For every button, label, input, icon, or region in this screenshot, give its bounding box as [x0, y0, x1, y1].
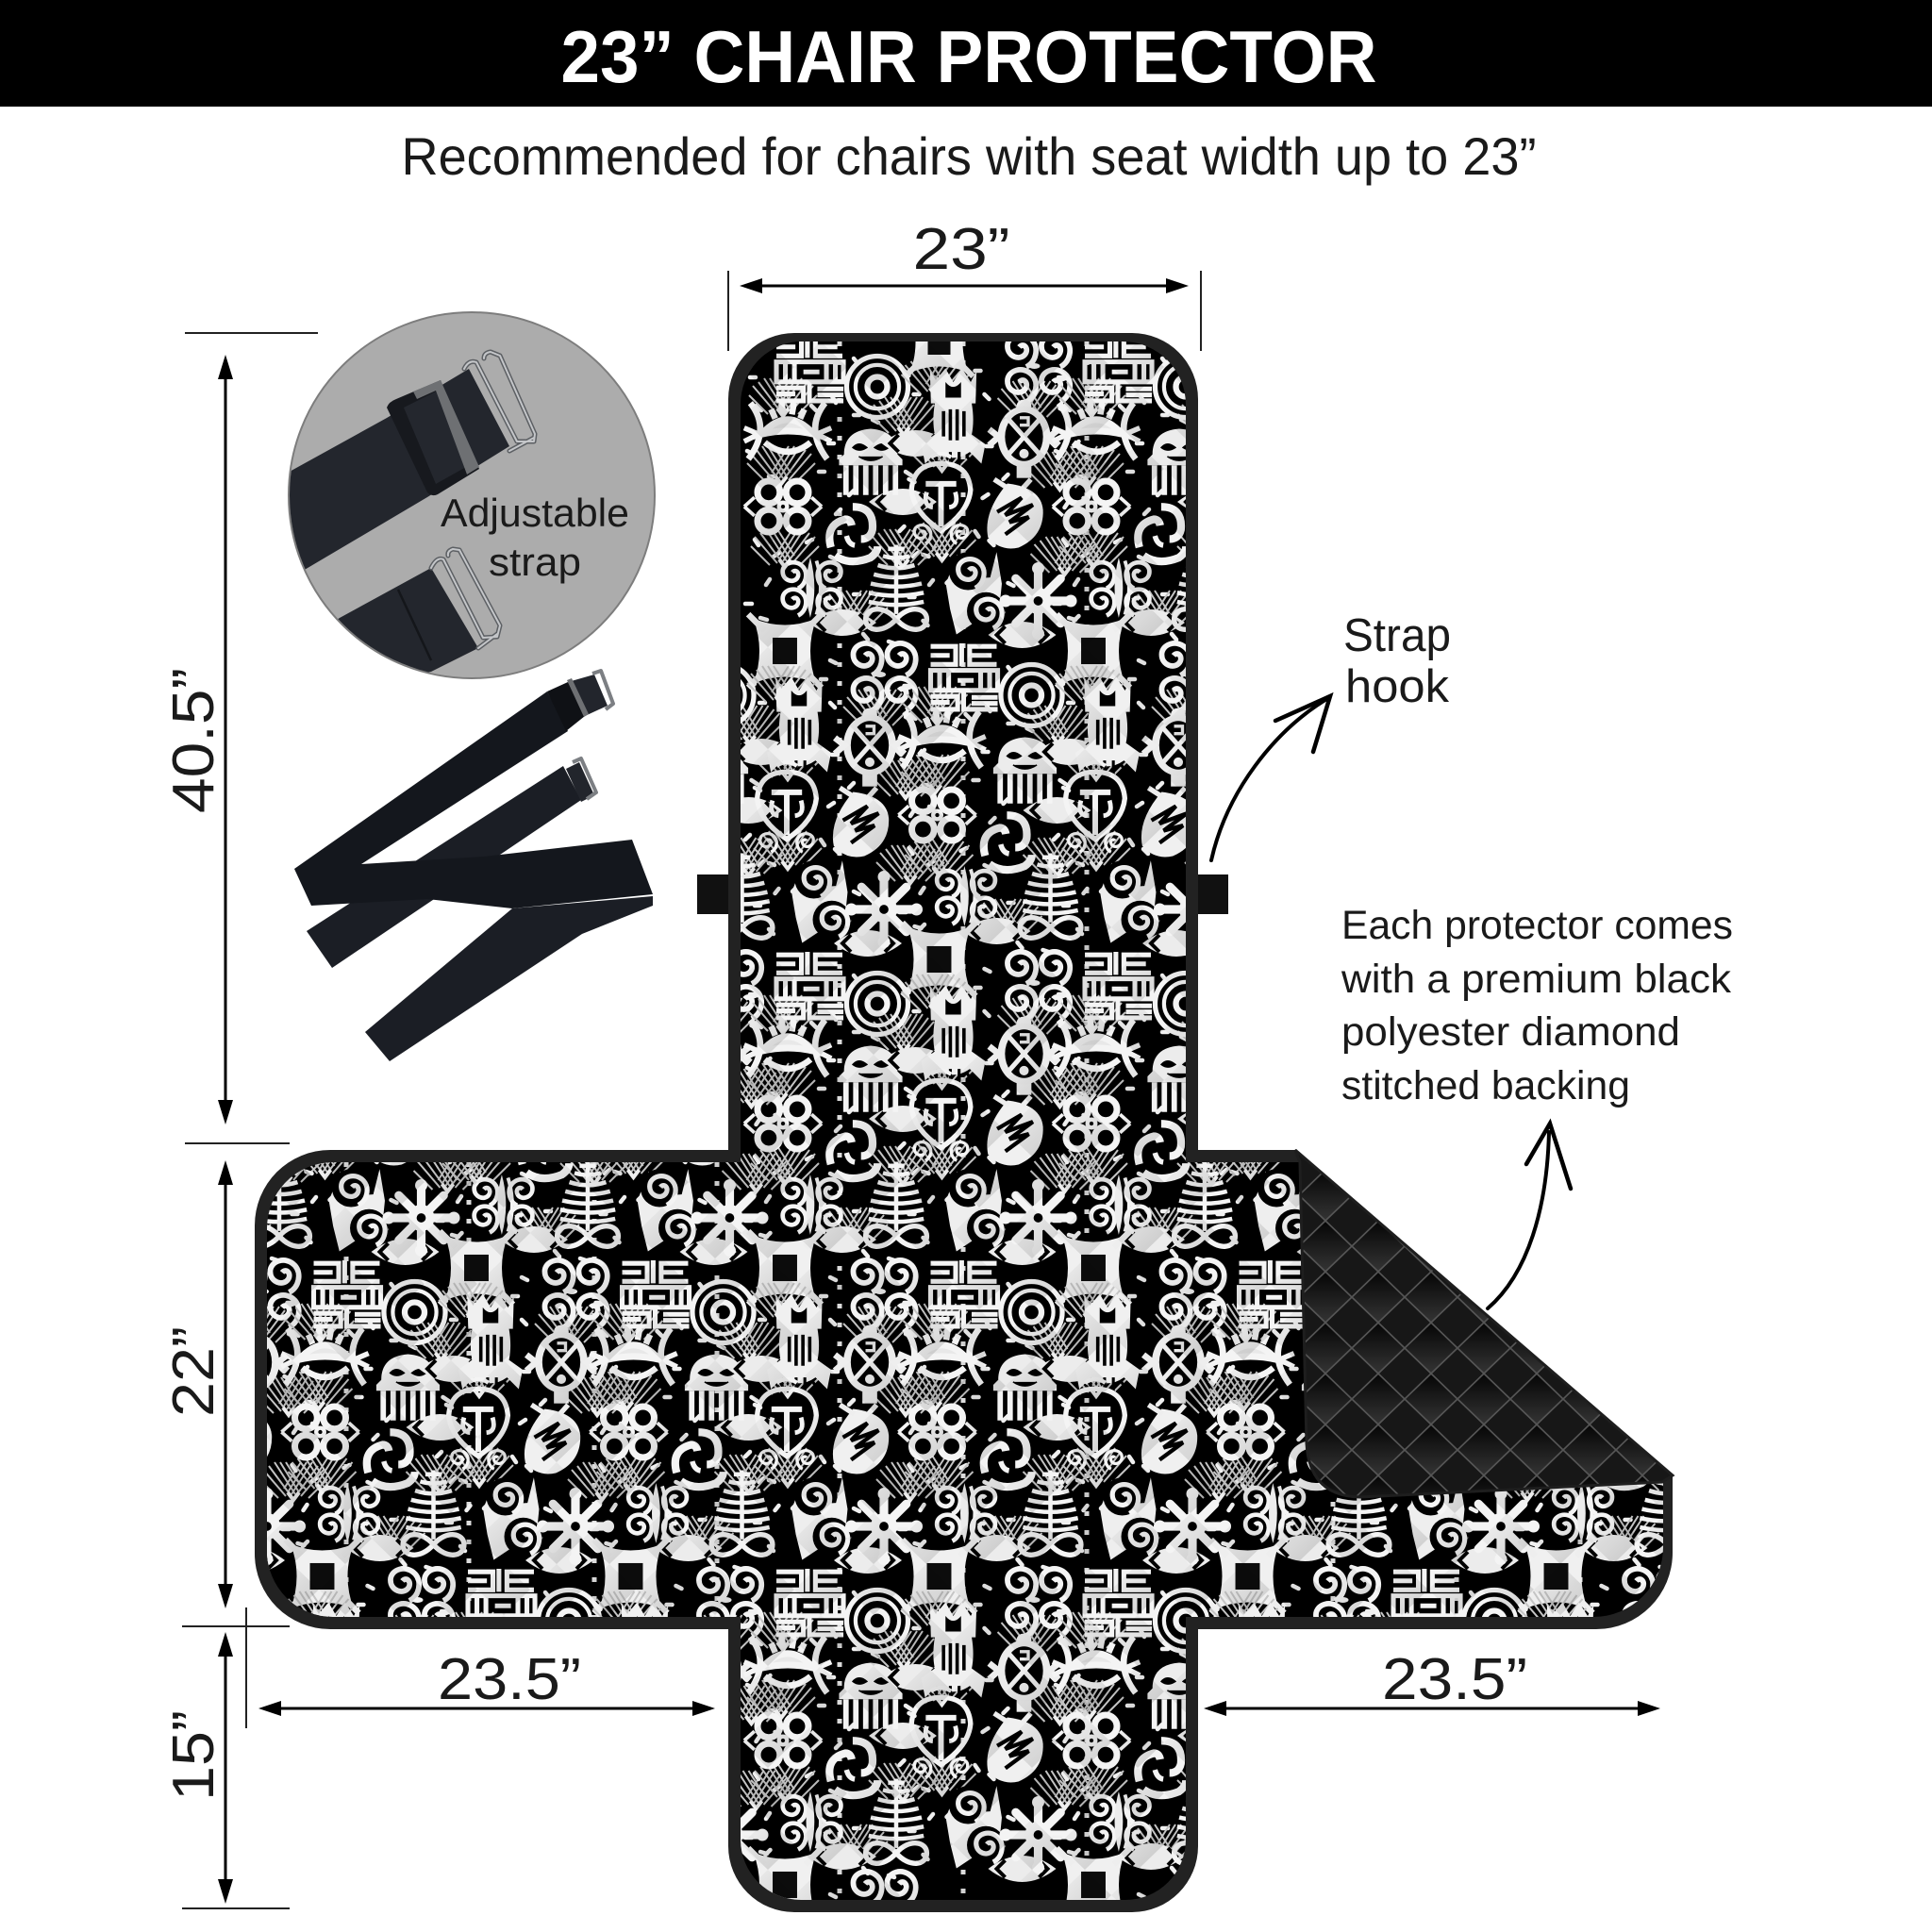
- dimension: top width 23 inches: 23”: [913, 217, 1009, 282]
- chair protector body: [255, 333, 1675, 1912]
- title banner: 23” CHAIR PROTECTOR: [560, 15, 1377, 98]
- backing description: [1341, 903, 1733, 1108]
- arrow to strap hook: [1211, 696, 1330, 860]
- dimension: right wing 23.5 inches: [1204, 1647, 1660, 1716]
- dimension: back height 40.5 inches: [161, 333, 318, 1143]
- adjustable strap close-up circle: strap: [489, 540, 581, 584]
- subtitle: Recommended for chairs with seat width up to 23”: [402, 126, 1536, 186]
- folded corner: quilted black backing: [1295, 1150, 1673, 1497]
- lower metal buckle: [431, 549, 500, 648]
- dimension: front flap 15 inches: [161, 1607, 290, 1908]
- strap hook label: hook: [1345, 661, 1450, 712]
- arrow to quilted backing: [1488, 1124, 1571, 1308]
- dimension: right wing 23.5 inches: 23.5”: [1382, 1647, 1527, 1712]
- dimension: seat depth 22 inches: 22”: [161, 1326, 226, 1417]
- lower strap band: [338, 569, 477, 672]
- strap hook tabs: [697, 874, 1228, 914]
- adjustable strap close-up circle: Adjustable: [441, 491, 629, 535]
- dimension: left wing 23.5 inches: [258, 1647, 715, 1716]
- dimension: front flap 15 inches: 15”: [161, 1710, 226, 1801]
- upper metal buckle: [464, 352, 535, 451]
- dimension: top width 23 inches: [728, 217, 1201, 351]
- backing description: Each protector comes: [1341, 903, 1733, 948]
- patterned fabric: [267, 341, 1663, 1900]
- backing description: polyester diamond: [1341, 1009, 1680, 1055]
- strap hook label: Strap: [1343, 610, 1451, 661]
- dimension: left wing 23.5 inches: 23.5”: [438, 1647, 581, 1712]
- backing description: with a premium black: [1341, 957, 1731, 1002]
- strap hook label: [1343, 610, 1451, 712]
- adjustable strap close-up circle: [279, 312, 655, 684]
- backing description: stitched backing: [1341, 1063, 1630, 1108]
- dimension: seat depth 22 inches: [161, 1160, 233, 1608]
- dimension: back height 40.5 inches: 40.5”: [161, 668, 226, 813]
- title banner: [0, 0, 1932, 107]
- upper strap band: [279, 369, 509, 574]
- folded black strap: [294, 671, 653, 1061]
- upper slider: [387, 380, 479, 495]
